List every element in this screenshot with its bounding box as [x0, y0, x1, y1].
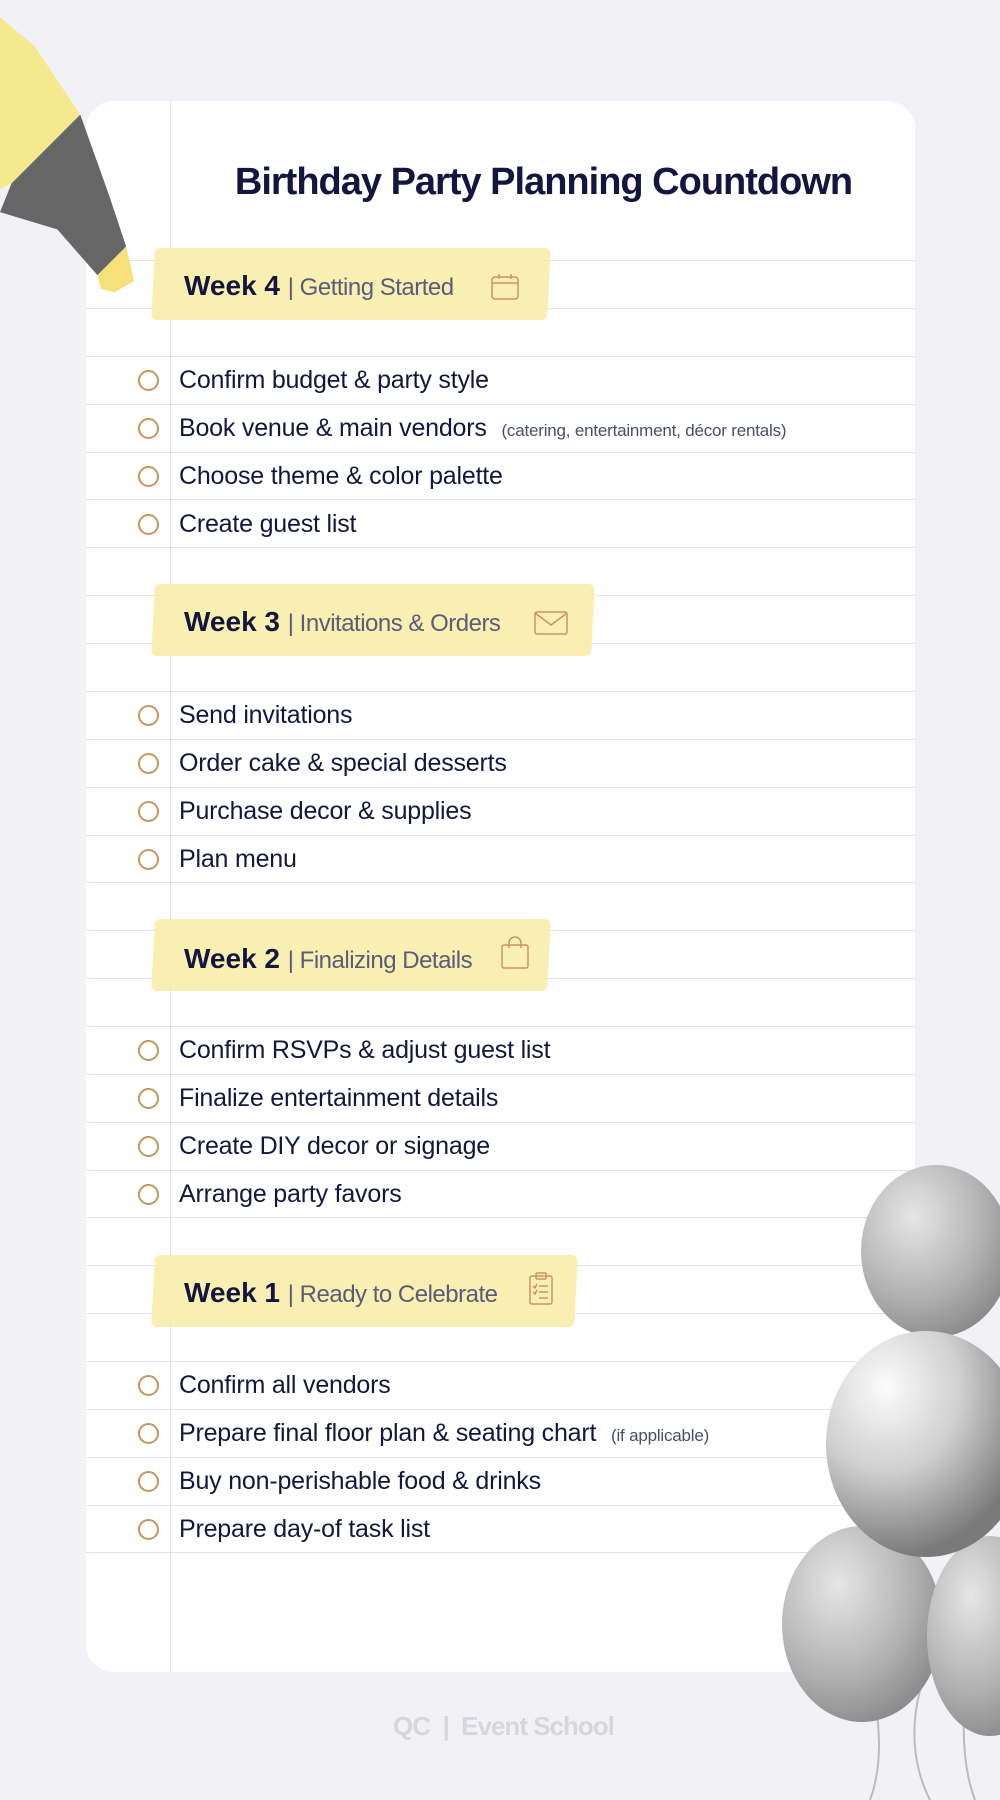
tasks week 4: Confirm budget & party style [179, 366, 489, 394]
tasks week 2: Confirm RSVPs & adjust guest list [179, 1036, 550, 1064]
tasks week 1: Prepare day-of task list [179, 1515, 430, 1543]
tasks week 2: Arrange party favors [179, 1180, 402, 1208]
tasks week 4: Choose theme & color palette [179, 462, 503, 490]
card [86, 101, 915, 1672]
week 2 header [151, 919, 551, 991]
week 4 header [151, 248, 551, 320]
tasks week 2: Create DIY decor or signage [179, 1132, 490, 1160]
week 3 header [151, 584, 595, 656]
tasks week 3: Send invitations [179, 701, 352, 729]
week 1 header: Week 1 | Ready to Celebrate [184, 1277, 497, 1308]
icon: calendar [491, 274, 519, 300]
week 1 header [151, 1255, 578, 1327]
tasks week 4: Create guest list [179, 510, 356, 538]
tasks week 3: Plan menu [179, 845, 297, 873]
tasks week 4: Book venue & main vendors (catering, entertainment, décor rentals) [179, 414, 786, 442]
icon: shopping bag [501, 936, 529, 969]
icon: envelope [534, 611, 568, 635]
title: Birthday Party Planning Countdown [235, 161, 852, 203]
week 2 header: Week 2 | Finalizing Details [184, 943, 472, 974]
tasks week 1: Confirm all vendors [179, 1371, 391, 1399]
tasks week 3 [138, 701, 507, 873]
tasks week 2: Finalize entertainment details [179, 1084, 498, 1112]
icon: clipboard [529, 1272, 553, 1305]
tasks week 2 [138, 1036, 550, 1208]
tasks week 1 [138, 1371, 709, 1543]
week 3 header: Week 3 | Invitations & Orders [184, 606, 500, 637]
tasks week 4 [138, 366, 786, 538]
footer logo: QC | Event School [393, 1711, 614, 1741]
tasks week 3: Order cake & special desserts [179, 749, 507, 777]
tasks week 1: Prepare final floor plan & seating chart (if applicable) [179, 1419, 709, 1447]
week 4 header: Week 4 | Getting Started [184, 270, 454, 301]
tasks week 1: Buy non-perishable food & drinks [179, 1467, 541, 1495]
tasks week 3: Purchase decor & supplies [179, 797, 471, 825]
icon: highlighter [0, 17, 134, 292]
